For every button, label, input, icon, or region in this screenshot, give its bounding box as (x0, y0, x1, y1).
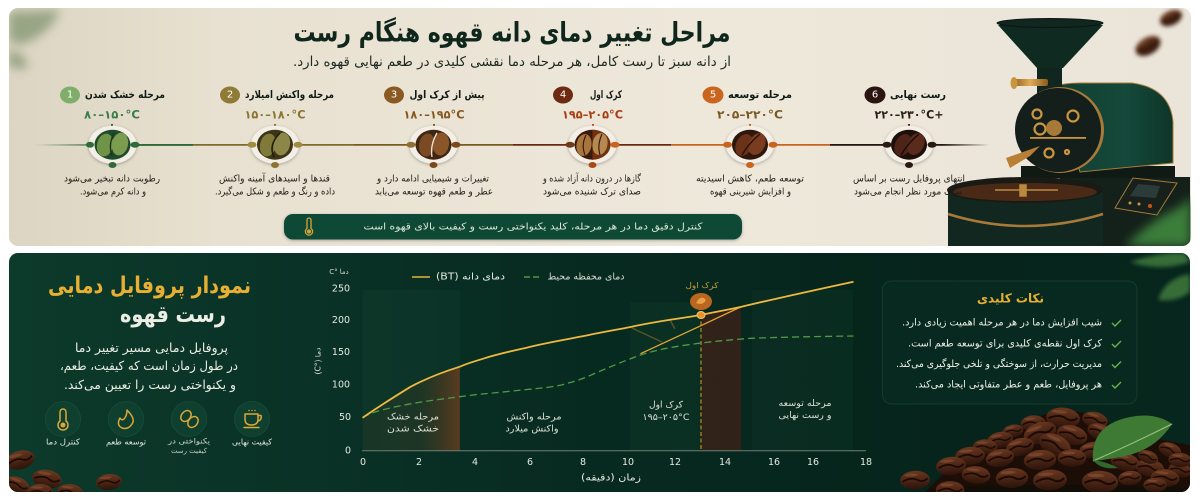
beans bottom left (9, 450, 122, 492)
panel: roasting stages (9, 7, 1191, 246)
decorative blurred leaves top left (9, 10, 60, 69)
heading (48, 273, 251, 328)
y axis labels: دما (°C) (314, 348, 322, 374)
y axis labels: 50 (339, 412, 351, 423)
stage 2: Maillard (215, 86, 335, 198)
stage 2: Maillard: ۱۵۰–۱۸۰°C (244, 108, 306, 122)
phase labels: و رست نهایی (778, 411, 832, 421)
icon: thermometer (305, 218, 313, 235)
y axis labels: 0 (345, 446, 351, 456)
panel: key points: مدیریت حرارت، از سوختگی و تلخی جلوگیری می‌کند. (896, 358, 1102, 370)
legend (412, 272, 624, 281)
callout: temperature control pill: کنترل دقیق دما در هر مرحله، کلید یکنواختی رست و کیفیت بالای قهوه است (364, 221, 703, 232)
timeline line (35, 144, 990, 146)
stage 2: Maillard: قندها و اسیدهای آمینه واکنش (219, 172, 330, 184)
phase labels: خشک شدن (387, 424, 439, 434)
heading: رست قهوه (120, 302, 226, 328)
stage 1: drying: مرحله خشک شدن (85, 89, 165, 101)
icon: roast uniformity: یکنواختی در (167, 436, 210, 446)
stage 5: development: و افزایش شیرینی قهوه (710, 186, 791, 198)
y axis labels: دما °C (329, 268, 349, 276)
y axis labels: 200 (332, 315, 350, 326)
panel: roast profile (2, 253, 1193, 500)
x axis labels: 8 (580, 457, 586, 468)
stage 3: before first crack: عطر و طعم قهوه توسعه می‌یابد (375, 186, 493, 198)
icon: final quality cup: کیفیت نهایی (232, 438, 272, 446)
x axis labels (360, 457, 872, 484)
subtitle: از دانه سبز تا رست کامل، هر مرحله دما نقشی کلیدی در طعم نهایی قهوه دارد. (293, 54, 731, 70)
stage 3: before first crack: تغییرات و شیمیایی ادامه دارد و (376, 174, 489, 184)
phase labels: ۱۹۵–۲۰۵°C (642, 413, 690, 423)
stage 4: first crack: گازها در درون دانه آزاد شده و (542, 172, 641, 184)
stage 6: final roast: 6 (872, 90, 878, 100)
panel: key points: نکات کلیدی (977, 290, 1044, 306)
icon: roast uniformity: کیفیت رست (171, 447, 208, 455)
decorative plant foreground (1125, 195, 1191, 246)
stage 4: first crack: صدای ترک شنیده می‌شود (543, 186, 641, 198)
stage 5: development: توسعه طعم، کاهش اسیدیته (696, 174, 804, 184)
stage 5: development (696, 86, 804, 198)
stage 3: before first crack (375, 86, 493, 198)
phase labels: مرحله واکنش (506, 412, 562, 422)
y axis labels (314, 268, 351, 456)
x axis labels: 12 (669, 457, 681, 468)
illustration: coffee roaster machine (947, 7, 1191, 246)
icon: temperature control: کنترل دما (46, 438, 80, 446)
stage 4: first crack (542, 86, 641, 198)
stage 3: before first crack: ۱۸۰–۱۹۵°C (404, 108, 464, 122)
axes (362, 450, 866, 452)
x axis labels: 4 (472, 457, 478, 468)
panel: key points: هر پروفایل، طعم و عطر متفاوتی ایجاد می‌کند. (915, 380, 1102, 390)
icon: temperature control (46, 402, 80, 446)
floating beans (1132, 7, 1185, 60)
stage 2: Maillard: مرحله واکنش امیلارد (245, 89, 334, 101)
stage 1: drying (60, 86, 165, 198)
stage 4: first crack: ۱۹۵–۲۰۵°C (562, 108, 623, 122)
x axis labels: 16 (768, 457, 780, 468)
stage 3: before first crack: پیش از کرک اول (410, 89, 485, 101)
stage 6: final roast: ۲۲۰–۲۳۰°C+ (874, 108, 944, 122)
phase labels: کرک اول (649, 400, 684, 410)
first crack marker (686, 281, 719, 451)
x axis labels: 18 (860, 457, 872, 468)
environment temperature curve (363, 336, 854, 418)
heading: نمودار پروفایل دمایی (48, 273, 251, 299)
bean temperature curve (363, 282, 854, 418)
stage 5: development: مرحله توسعه (728, 89, 792, 101)
phase bands (363, 290, 460, 451)
check marks (1112, 320, 1121, 388)
legend: دمای محفظه محیط (548, 272, 624, 282)
icon: roast uniformity (167, 402, 210, 455)
stage 5: development: 5 (710, 90, 716, 100)
roaster control panel (1115, 178, 1177, 215)
crack slope line (640, 307, 740, 354)
decorative blurred leaves (1130, 253, 1190, 300)
legend: دمای دانه (BT) (436, 272, 505, 282)
stage 2: Maillard: 2 (227, 90, 233, 100)
stage 1: drying: 1 (67, 90, 73, 100)
phase labels: واکنش میلارد (506, 424, 558, 434)
chart: roast temperature profile (314, 268, 872, 484)
stage 4: first crack: 4 (560, 90, 566, 100)
description: و یکنواختی رست را تعیین می‌کند. (64, 377, 236, 393)
phase labels: مرحله توسعه (778, 399, 832, 409)
stage 1: drying: و دانه کرم می‌شود. (80, 186, 146, 198)
stage 1: drying: ۸۰–۱۵۰°C (84, 108, 140, 122)
icon: flavor development (106, 402, 146, 446)
y axis labels: 100 (332, 380, 350, 390)
stage 3: before first crack: 3 (391, 90, 397, 100)
stage 6: final roast: انتهای پروفایل رست بر اساس (853, 174, 965, 184)
stage 2: Maillard: داده و رنگ و طعم و شکل می‌گیرد. (215, 186, 335, 198)
x axis labels: 0 (360, 457, 366, 468)
stage 6: final roast: رست نهایی (890, 89, 946, 101)
x axis labels: 2 (416, 457, 422, 468)
panel: key points (882, 281, 1137, 404)
description (60, 340, 238, 393)
first crack marker: کرک اول (686, 281, 719, 290)
title: مراحل تغییر دمای دانه قهوه هنگام رست (294, 16, 730, 48)
x axis labels: 16 (807, 457, 819, 468)
green coffee leaf (1093, 416, 1172, 461)
y axis labels: 150 (332, 347, 350, 358)
description: پروفایل دمایی مسیر تغییر دما (75, 340, 229, 356)
x axis labels: زمان (دقیقه) (581, 472, 641, 484)
panel: key points: کرک اول نقطه‌ی کلیدی برای توسعه طعم است. (908, 338, 1102, 350)
description: در طول زمان است که کیفیت، طعم، (60, 358, 238, 374)
stage 6: final roast (853, 86, 965, 198)
roaster cooling tray (948, 192, 1060, 246)
icon: flavor development: توسعه طعم (106, 438, 146, 446)
y axis labels: 250 (332, 284, 350, 294)
stage 5: development: ۲۰۵–۲۲۰°C (717, 108, 783, 122)
x axis labels: 10 (622, 457, 634, 468)
callout: temperature control pill (284, 214, 742, 240)
phase labels (387, 399, 832, 434)
panel: key points: شیب افزایش دما در هر مرحله اهمیت زیادی دارد. (902, 318, 1102, 328)
stage 6: final roast: سبک مورد نظر انجام می‌شود (854, 186, 962, 198)
illustration: coffee bean pile with leaf (900, 406, 1193, 499)
stage 4: first crack: کرک اول (590, 89, 623, 101)
x axis labels: 14 (719, 457, 731, 468)
phase labels: مرحله خشک (387, 412, 439, 422)
icon: final quality cup (232, 402, 272, 446)
x axis labels: 6 (527, 457, 533, 468)
stage 1: drying: رطوبت دانه تبخیر می‌شود (64, 174, 160, 184)
